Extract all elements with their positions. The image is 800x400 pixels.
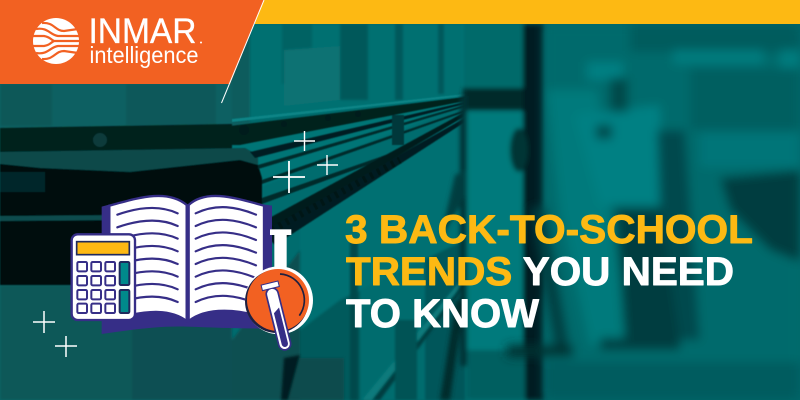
diagonal white accent line [222, 0, 264, 103]
headline [345, 208, 753, 336]
dark side band [0, 94, 465, 285]
headline line 1: 3 BACK-TO-SCHOOL [345, 208, 753, 252]
icon: flask and test tube [245, 229, 313, 352]
headline line 3: TO KNOW [346, 292, 539, 336]
icon: calculator [72, 234, 135, 320]
logo wordmark: INMAR [88, 11, 196, 51]
sparkles: lower plus signs [33, 311, 77, 357]
lower bus details [281, 240, 465, 400]
sparkles: upper plus signs [273, 131, 338, 193]
icon: book [102, 196, 272, 334]
yellow top bar [255, 0, 800, 24]
logo: Inmar Intelligence [32, 11, 202, 68]
doorway and post [440, 24, 544, 400]
blurred students [507, 24, 800, 400]
registered mark [200, 42, 202, 44]
logo tagline: intelligence [90, 42, 198, 68]
bus body [0, 24, 465, 400]
orange logo banner [0, 0, 264, 84]
illustration: book, calculator and flask [72, 196, 313, 352]
icon: logo globe [32, 18, 80, 64]
headline line 2: TRENDS YOU NEED [346, 250, 734, 294]
